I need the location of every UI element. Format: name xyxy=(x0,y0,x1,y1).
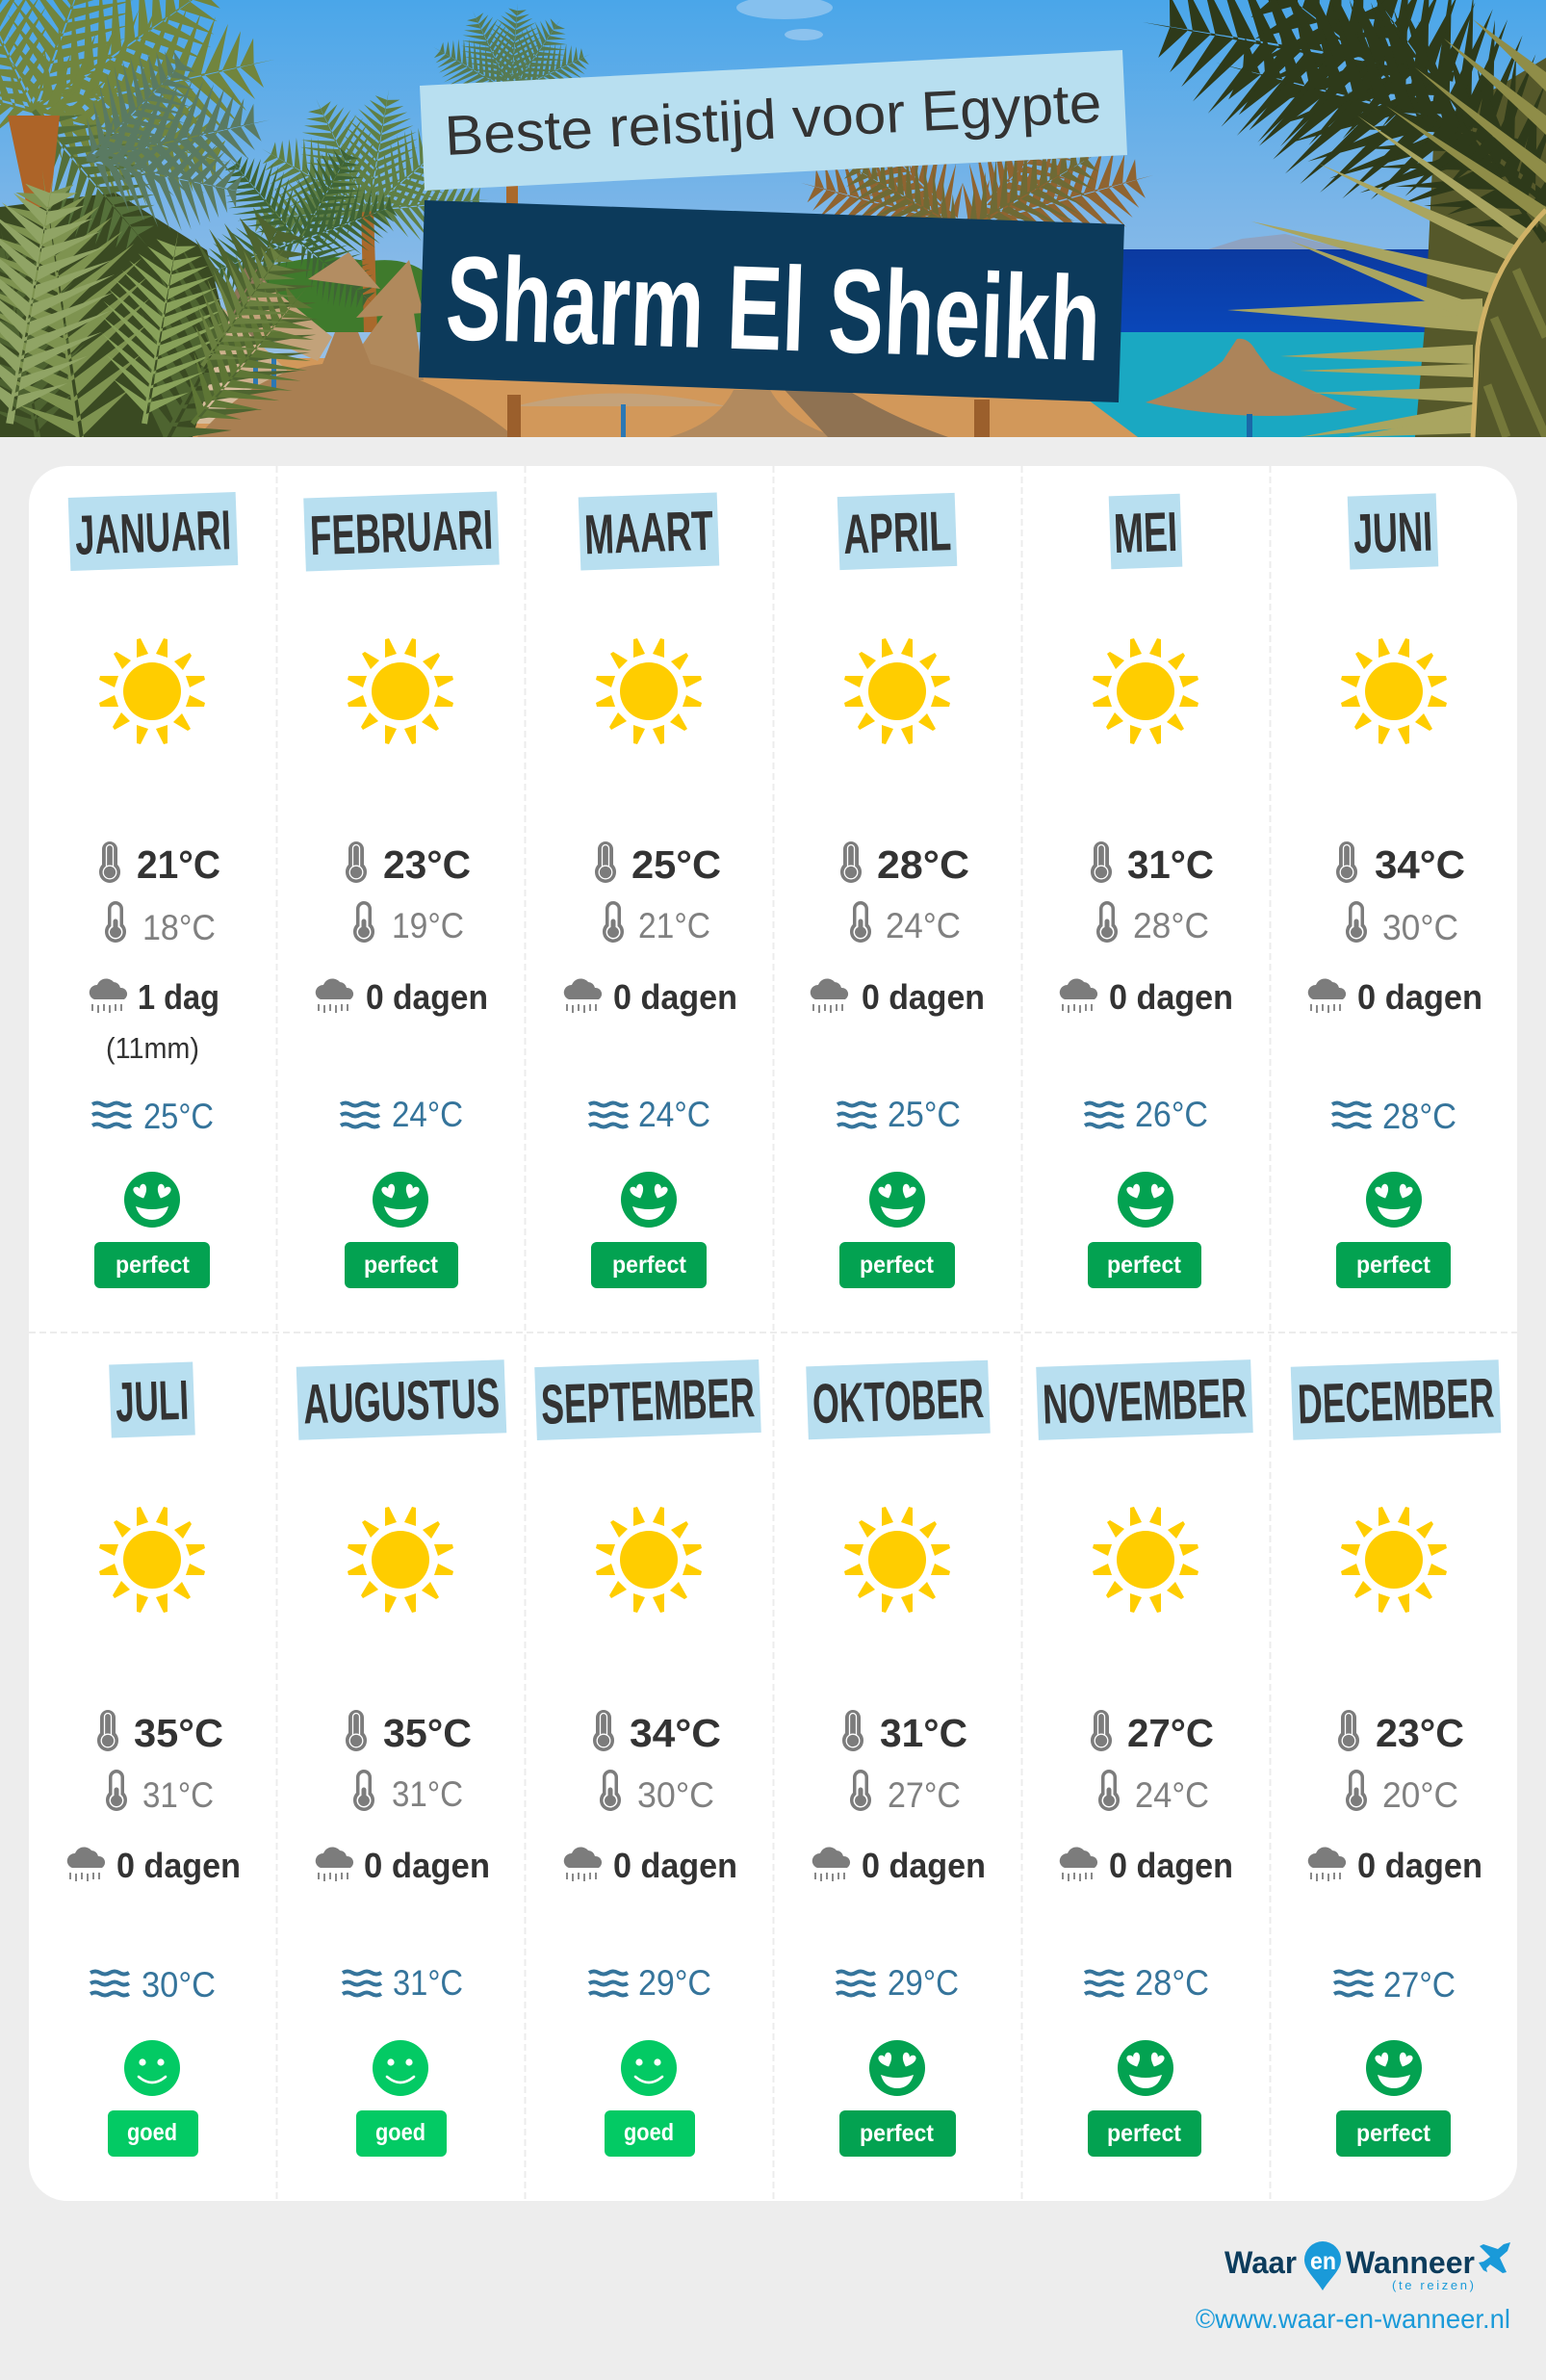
month: maart xyxy=(564,493,737,1288)
panel: climate table xyxy=(29,466,1517,2201)
max temperature xyxy=(346,841,471,887)
icon: plane xyxy=(1479,2242,1510,2273)
rain days: 1 dag xyxy=(138,977,219,1017)
rating pill: goed xyxy=(624,2119,674,2146)
icon: rating face xyxy=(621,1172,677,1228)
month: november xyxy=(1036,1359,1253,2157)
water temperature: 28°C xyxy=(1135,1963,1209,2003)
subtitle banner xyxy=(420,50,1127,191)
water temperature: 26°C xyxy=(1135,1095,1208,1134)
month label: NOVEMBER xyxy=(1042,1366,1248,1436)
month label xyxy=(534,1359,761,1440)
rating pill: perfect xyxy=(612,1252,687,1279)
logo: Waar en Wanneer xyxy=(1224,2241,1510,2292)
rating pill xyxy=(1088,2110,1201,2157)
water temperature xyxy=(92,1097,214,1136)
max temperature xyxy=(346,1710,472,1755)
month label: AUGUSTUS xyxy=(302,1366,501,1436)
month: december xyxy=(1291,1359,1501,2157)
max temperature: 35°C xyxy=(383,1711,472,1755)
min temperature xyxy=(603,901,710,945)
max temperature: 31°C xyxy=(1127,842,1214,887)
water temperature: 24°C xyxy=(638,1095,710,1134)
month label xyxy=(837,493,957,570)
min temperature: 27°C xyxy=(888,1775,961,1815)
max temperature xyxy=(842,1710,967,1755)
rating pill: goed xyxy=(127,2119,177,2146)
logo: Waar en Wanneer: Wanneer xyxy=(1346,2245,1475,2280)
rain days: 0 dagen xyxy=(1357,977,1482,1017)
max temperature: 23°C xyxy=(383,842,471,887)
icon: sun xyxy=(348,1507,453,1613)
icon: sun xyxy=(844,1507,950,1613)
logo: Waar en Wanneer: en xyxy=(1310,2248,1336,2275)
icon: sun xyxy=(1093,1507,1198,1613)
background greenery xyxy=(264,257,423,332)
water temperature: 28°C xyxy=(1382,1097,1456,1136)
month: augustus xyxy=(296,1359,506,2157)
rainfall: (11mm) xyxy=(106,1031,199,1065)
month: juni xyxy=(1308,493,1482,1288)
max temperature: 27°C xyxy=(1127,1711,1214,1755)
icon: rating face xyxy=(1118,2040,1173,2096)
water temperature: 30°C xyxy=(142,1965,216,2005)
water temperature xyxy=(341,1095,463,1134)
month label: JUNI xyxy=(1353,501,1433,565)
water temperature: 31°C xyxy=(393,1963,463,2003)
rating pill xyxy=(356,2110,447,2157)
water temperature xyxy=(1332,1097,1456,1136)
min temperature xyxy=(106,1770,214,1815)
rating pill: perfect xyxy=(860,1252,935,1279)
water temperature xyxy=(589,1095,710,1134)
month label: MEI xyxy=(1113,501,1178,565)
month label: OKTOBER xyxy=(812,1367,985,1436)
water temperature xyxy=(837,1095,961,1134)
rating pill: goed xyxy=(375,2119,425,2146)
subtitle banner: Beste reistijd voor Egypte xyxy=(443,72,1103,168)
icon: sun xyxy=(348,638,453,744)
rain days xyxy=(564,1846,737,1885)
max temperature xyxy=(595,841,721,887)
max temperature: 21°C xyxy=(137,842,220,887)
water temperature xyxy=(1334,1965,1456,2005)
water temperature xyxy=(837,1963,959,2003)
min temperature xyxy=(1096,901,1209,945)
water temperature xyxy=(589,1963,711,2003)
icon: rating face xyxy=(124,2040,180,2096)
icon: rating face xyxy=(621,2040,677,2096)
min temperature xyxy=(353,901,464,945)
rain days xyxy=(67,1846,241,1885)
rain days xyxy=(1308,1846,1482,1885)
min temperature: 24°C xyxy=(1135,1775,1209,1815)
max temperature: 35°C xyxy=(134,1711,223,1755)
rain days: 0 dagen xyxy=(1357,1846,1482,1885)
rating pill: perfect xyxy=(1356,1252,1431,1279)
icon: sun xyxy=(1093,638,1198,744)
rating pill xyxy=(1336,2110,1451,2157)
rain days xyxy=(811,977,985,1017)
min temperature xyxy=(353,1770,463,1814)
water temperature: 25°C xyxy=(888,1095,961,1134)
min temperature: 18°C xyxy=(142,908,216,947)
month label xyxy=(68,492,238,571)
month label xyxy=(296,1359,506,1440)
water temperature xyxy=(90,1965,216,2005)
max temperature xyxy=(99,841,220,887)
rating pill: perfect xyxy=(1107,1252,1182,1279)
max temperature: 34°C xyxy=(630,1711,721,1755)
min temperature: 19°C xyxy=(392,906,464,945)
rain days: 0 dagen xyxy=(862,977,985,1017)
min temperature: 31°C xyxy=(392,1774,463,1814)
water temperature: 24°C xyxy=(392,1095,463,1134)
rain days xyxy=(1060,1846,1233,1885)
rain days xyxy=(90,977,219,1017)
rating pill xyxy=(839,2110,956,2157)
title banner xyxy=(419,200,1124,402)
logo: Waar en Wanneer: (te reizen) xyxy=(1392,2278,1474,2292)
max temperature xyxy=(1091,1710,1214,1755)
month label xyxy=(806,1360,991,1439)
month: januari xyxy=(68,492,238,1288)
month: februari xyxy=(303,492,500,1288)
rating pill xyxy=(839,1242,955,1288)
min temperature xyxy=(1346,1770,1458,1815)
rating pill xyxy=(605,2110,695,2157)
min temperature: 31°C xyxy=(142,1775,214,1815)
max temperature xyxy=(97,1710,223,1755)
water temperature: 29°C xyxy=(638,1963,711,2003)
max temperature: 31°C xyxy=(880,1711,967,1755)
month label: JULI xyxy=(115,1369,190,1434)
rating pill: perfect xyxy=(1107,2120,1182,2147)
min temperature: 30°C xyxy=(637,1775,714,1815)
rain days: 0 dagen xyxy=(862,1846,986,1885)
min temperature: 24°C xyxy=(886,906,961,945)
month label: MAART xyxy=(583,500,714,566)
rating pill xyxy=(108,2110,198,2157)
rating pill xyxy=(345,1242,458,1288)
max temperature xyxy=(1091,841,1214,887)
min temperature xyxy=(600,1770,714,1815)
icon: rating face xyxy=(373,2040,428,2096)
min temperature xyxy=(850,1770,961,1815)
icon: rating face xyxy=(373,1172,428,1228)
month: september xyxy=(534,1359,761,2157)
max temperature xyxy=(1338,1710,1464,1755)
rain days xyxy=(1060,977,1233,1017)
icon: rating face xyxy=(1118,1172,1173,1228)
min temperature xyxy=(1098,1770,1209,1815)
rating pill: perfect xyxy=(364,1252,439,1279)
rating pill xyxy=(1088,1242,1201,1288)
month label: JANUARI xyxy=(74,499,232,567)
icon: sun xyxy=(1341,638,1447,744)
right palms xyxy=(1415,58,1546,437)
max temperature xyxy=(1336,841,1465,887)
month: april xyxy=(811,493,985,1288)
rain days xyxy=(812,1846,986,1885)
rain days xyxy=(1308,977,1482,1017)
min temperature: 30°C xyxy=(1382,908,1458,947)
logo: Waar en Wanneer: Waar xyxy=(1224,2245,1297,2280)
icon: rating face xyxy=(124,1172,180,1228)
icon: rating face xyxy=(1366,2040,1422,2096)
month label xyxy=(109,1362,195,1437)
rating pill xyxy=(1336,1242,1451,1288)
hero photo: beach with palms, parasols and sea xyxy=(0,0,1546,437)
water temperature: 29°C xyxy=(888,1963,959,2003)
month: juli xyxy=(67,1362,241,2157)
max temperature: 34°C xyxy=(1375,842,1465,887)
icon: sun xyxy=(596,1507,702,1613)
max temperature: 23°C xyxy=(1376,1711,1464,1755)
max temperature xyxy=(593,1710,721,1755)
website credit: ©www.waar-en-wanneer.nl xyxy=(1196,2304,1510,2334)
rain days: 0 dagen xyxy=(1109,977,1233,1017)
max temperature: 25°C xyxy=(631,842,721,887)
rating pill xyxy=(591,1242,707,1288)
rain days: 0 dagen xyxy=(364,1846,490,1885)
water temperature: 27°C xyxy=(1383,1965,1456,2005)
rain days: 0 dagen xyxy=(366,977,488,1017)
rain days: 0 dagen xyxy=(116,1846,241,1885)
rating pill: perfect xyxy=(860,2120,935,2147)
icon: sun xyxy=(596,638,702,744)
min temperature: 28°C xyxy=(1133,906,1209,945)
water temperature xyxy=(1085,1963,1209,2003)
min temperature xyxy=(105,901,216,947)
month: oktober xyxy=(806,1360,991,2157)
icon: map pin xyxy=(1304,2241,1341,2290)
rain days: 0 dagen xyxy=(613,1846,737,1885)
rain days: 0 dagen xyxy=(613,977,737,1017)
icon: sun xyxy=(99,1507,205,1613)
month label xyxy=(579,493,719,570)
month label xyxy=(1348,493,1438,570)
month label xyxy=(303,492,500,571)
title banner: Sharm El Sheikh xyxy=(444,232,1102,387)
rain days xyxy=(316,977,488,1017)
icon: sun xyxy=(99,638,205,744)
icon: sun xyxy=(844,638,950,744)
rain days: 0 dagen xyxy=(1109,1846,1233,1885)
rating pill xyxy=(94,1242,210,1288)
month label: APRIL xyxy=(842,500,952,566)
month label xyxy=(1109,494,1182,569)
icon: rating face xyxy=(869,1172,925,1228)
icon: rating face xyxy=(1366,1172,1422,1228)
min temperature: 21°C xyxy=(638,906,710,945)
max temperature xyxy=(840,841,969,887)
icon: sun xyxy=(1341,1507,1447,1613)
rating pill: perfect xyxy=(116,1252,191,1279)
left palms xyxy=(0,193,226,437)
parasols xyxy=(188,252,424,424)
month label: FEBRUARI xyxy=(309,499,494,567)
water temperature: 25°C xyxy=(143,1097,214,1136)
icon: rating face xyxy=(869,2040,925,2096)
month label: SEPTEMBER xyxy=(540,1366,756,1436)
min temperature xyxy=(1346,901,1458,947)
rain days xyxy=(564,977,737,1017)
max temperature: 28°C xyxy=(877,842,969,887)
month label xyxy=(1036,1359,1253,1440)
min temperature xyxy=(850,901,961,945)
month: mei xyxy=(1060,494,1233,1288)
rating pill: perfect xyxy=(1356,2120,1431,2147)
water temperature xyxy=(343,1963,463,2003)
min temperature: 20°C xyxy=(1382,1775,1458,1815)
water temperature xyxy=(1085,1095,1208,1134)
